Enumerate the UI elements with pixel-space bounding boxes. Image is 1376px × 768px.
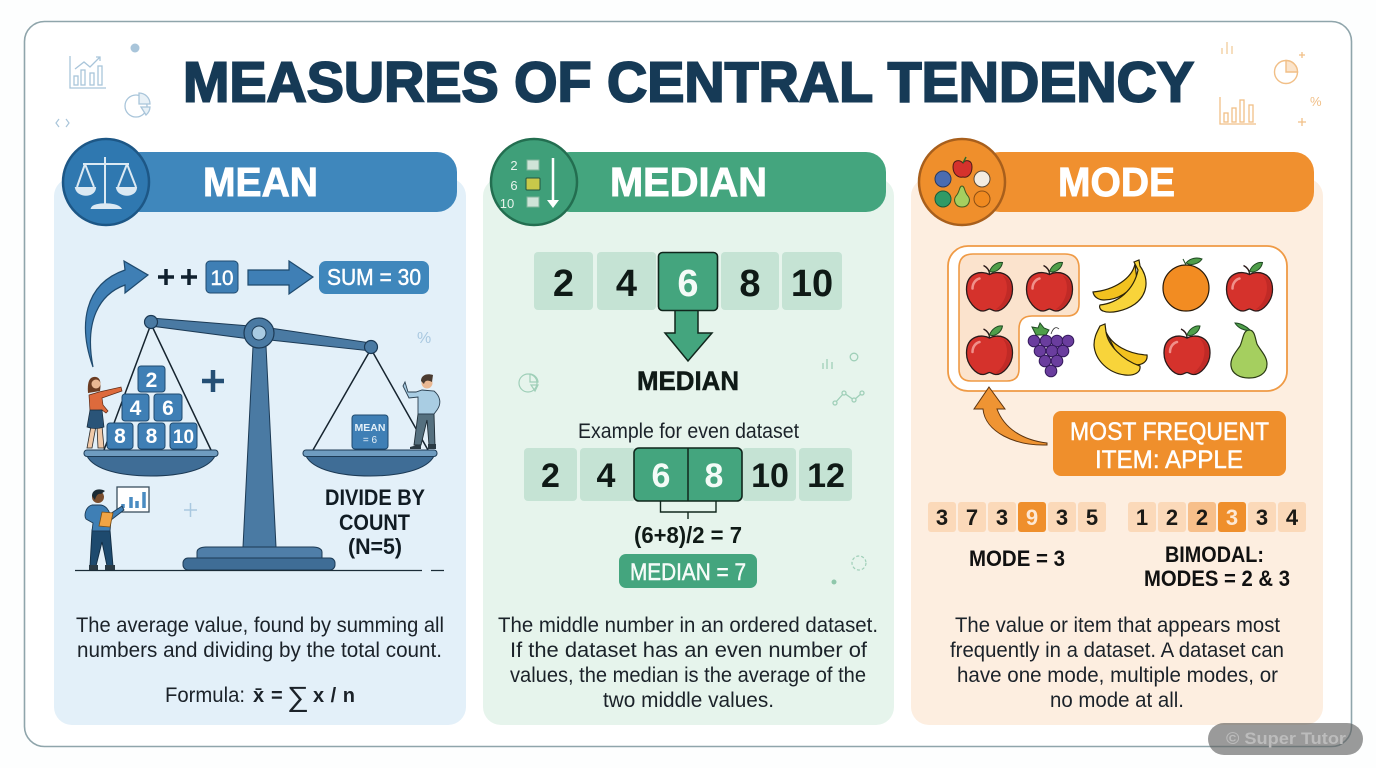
icon: apple — [1226, 262, 1272, 311]
formula: x / n — [313, 685, 355, 707]
mode number row: 7 — [966, 505, 978, 530]
odd dataset boxes — [534, 252, 842, 310]
formula: x̄ — [253, 685, 264, 707]
icon: decorative line chart top left — [70, 56, 106, 88]
bimodal number row: 3 — [1226, 505, 1238, 530]
bimodal number row: 4 — [1286, 505, 1299, 530]
icon: woman — [87, 377, 122, 448]
bimodal number row — [1128, 502, 1306, 532]
mode number row: 5 — [1086, 505, 1098, 530]
description: The average value, found by summing all — [76, 614, 444, 637]
panel background — [483, 178, 894, 725]
icon: apple — [1026, 262, 1072, 311]
divide by count label: DIVIDE BY — [325, 485, 425, 510]
description: The value or item that appears most — [955, 614, 1280, 637]
bimodal number row: 3 — [1256, 505, 1268, 530]
icon: decorative mini bars top right — [1222, 42, 1232, 54]
left pan blocks — [107, 366, 197, 449]
odd dataset boxes: 10 — [791, 263, 833, 305]
icon: decorative bars and circle — [823, 353, 858, 369]
heading: MEAN — [203, 159, 318, 205]
heading: MEDIAN — [610, 159, 767, 205]
balance scale — [84, 316, 437, 570]
icon: decorative plus and percent — [1298, 52, 1322, 126]
icon: apple — [966, 326, 1012, 375]
odd dataset boxes: 4 — [616, 263, 637, 305]
sum pill: SUM = 30 — [327, 264, 421, 290]
description: two middle values. — [603, 689, 774, 712]
mode label: MODE = 3 — [969, 546, 1065, 571]
formula: ∑ — [287, 681, 309, 712]
bimodal number row: 2 — [1166, 505, 1178, 530]
mode number row: 9 — [1026, 505, 1038, 530]
even dataset boxes — [524, 448, 852, 501]
highlighted pair — [634, 448, 742, 501]
most frequent callout: MOST FREQUENT — [1070, 418, 1269, 446]
fruit grid box — [948, 246, 1287, 391]
icon: sorted list badge — [491, 139, 577, 225]
description: The middle number in an ordered dataset. — [498, 614, 878, 637]
icon: decorative dot — [130, 44, 140, 52]
heading bar — [550, 152, 886, 212]
description: have one mode, multiple modes, or — [957, 664, 1278, 687]
icon: apple — [1164, 326, 1210, 375]
strings — [104, 324, 428, 450]
left pan blocks: 6 — [162, 397, 174, 420]
curved arrow — [974, 387, 1047, 445]
heading bar — [980, 152, 1314, 212]
title: MEASURES OF CENTRAL TENDENCY — [183, 50, 1194, 114]
panel background — [911, 178, 1323, 725]
icon: decorative pie — [519, 374, 538, 392]
icon: decorative line chart — [833, 391, 864, 405]
heading bar — [120, 152, 457, 212]
mode number row: 3 — [996, 505, 1008, 530]
even dataset boxes: 10 — [751, 457, 789, 495]
mean block: MEAN — [355, 422, 385, 434]
icon: pear — [1231, 323, 1267, 378]
icon: decorative bar chart top right — [1220, 97, 1256, 124]
icon: decorative pie chart top left — [125, 93, 150, 117]
odd dataset boxes: 8 — [739, 263, 761, 305]
plus sign — [181, 269, 197, 285]
icon: grapes — [1028, 323, 1074, 377]
heading: MODE — [1058, 159, 1175, 205]
description: numbers and dividing by the total count. — [77, 639, 442, 662]
pans — [87, 456, 215, 476]
mean block: = 6 — [363, 435, 378, 446]
icon: presenter with chart — [85, 487, 149, 570]
even dataset boxes: 2 — [541, 457, 560, 495]
icon: items badge — [919, 139, 1005, 225]
description: frequently in a dataset. A dataset can — [950, 639, 1284, 662]
most frequent callout — [1053, 411, 1286, 476]
mode number row: 3 — [936, 505, 948, 530]
panel: mean — [54, 139, 466, 725]
icon: decorative dashed circle — [852, 556, 866, 570]
icon: man on right pan — [403, 374, 440, 449]
formula — [165, 681, 355, 712]
faint percent: % — [417, 330, 431, 347]
watermark — [1208, 723, 1363, 755]
icon: decorative plus and percent: % — [1310, 94, 1322, 109]
left pan blocks: 8 — [114, 425, 126, 448]
divide by count label: (N=5) — [348, 534, 402, 559]
description: If the dataset has an even number of — [510, 639, 867, 662]
odd dataset boxes: 2 — [553, 263, 574, 305]
bimodal number row: 2 — [1196, 505, 1208, 530]
icon: sorted list badge: 10 — [500, 196, 514, 211]
left pan blocks: 8 — [146, 425, 158, 448]
even dataset boxes: 4 — [597, 457, 616, 495]
panel: median — [483, 139, 894, 725]
panel: mode — [911, 139, 1323, 725]
icon: orange — [1163, 258, 1209, 311]
plus — [202, 370, 224, 392]
icon: decorative dot — [832, 580, 836, 584]
arrow to sum — [248, 261, 313, 294]
left pan blocks: 10 — [173, 427, 194, 448]
median result pill: MEDIAN = 7 — [630, 559, 746, 586]
plus signs — [158, 269, 174, 285]
most frequent callout: ITEM: APPLE — [1095, 446, 1243, 474]
even dataset boxes: 12 — [807, 457, 845, 495]
faint plus — [184, 503, 197, 517]
icon: decorative code brackets — [56, 119, 69, 127]
icon: sorted list badge: 2 — [510, 158, 518, 173]
mode number row: 3 — [1056, 505, 1068, 530]
icon: decorative pie chart top right — [1274, 60, 1298, 84]
highlighted pair: 6 — [652, 457, 670, 495]
divide by count label — [325, 485, 425, 559]
panel background — [54, 178, 466, 725]
bimodal number row: 1 — [1136, 505, 1148, 530]
ground line — [75, 570, 444, 572]
curved arrow — [86, 261, 148, 367]
left pan blocks: 2 — [146, 369, 157, 392]
icon: banana — [1094, 324, 1147, 375]
left pan blocks: 4 — [130, 397, 142, 420]
description: no mode at all. — [1050, 689, 1184, 712]
icon: sorted list badge: 6 — [510, 178, 518, 193]
highlighted middle box: 6 — [677, 263, 699, 305]
apple group highlight — [959, 254, 1079, 381]
bimodal label: BIMODAL: — [1165, 542, 1264, 567]
watermark: © Super Tutor — [1226, 729, 1346, 748]
icon: banana — [1093, 260, 1146, 312]
median label: MEDIAN — [637, 366, 739, 396]
divide by count label: COUNT — [339, 510, 411, 535]
mean block — [352, 415, 388, 449]
number box 10: 10 — [210, 267, 234, 290]
description — [950, 614, 1284, 712]
median arrow — [665, 309, 712, 361]
formula: Formula: — [165, 684, 245, 707]
description — [498, 614, 878, 712]
description: values, the median is the average of the — [510, 664, 866, 687]
calculation: (6+8)/2 = 7 — [634, 522, 742, 548]
bracket — [660, 501, 716, 519]
bimodal label: MODES = 2 & 3 — [1144, 566, 1290, 591]
formula: = — [271, 685, 283, 707]
icon: balance scale badge — [63, 139, 149, 225]
highlighted middle box — [658, 252, 718, 310]
number box 10 — [206, 261, 238, 293]
description — [76, 614, 444, 662]
even dataset caption: Example for even dataset — [578, 420, 799, 443]
highlighted pair: 8 — [705, 457, 723, 495]
bimodal label — [1144, 542, 1290, 591]
icon: apple — [966, 262, 1012, 311]
mode number row — [928, 502, 1106, 532]
